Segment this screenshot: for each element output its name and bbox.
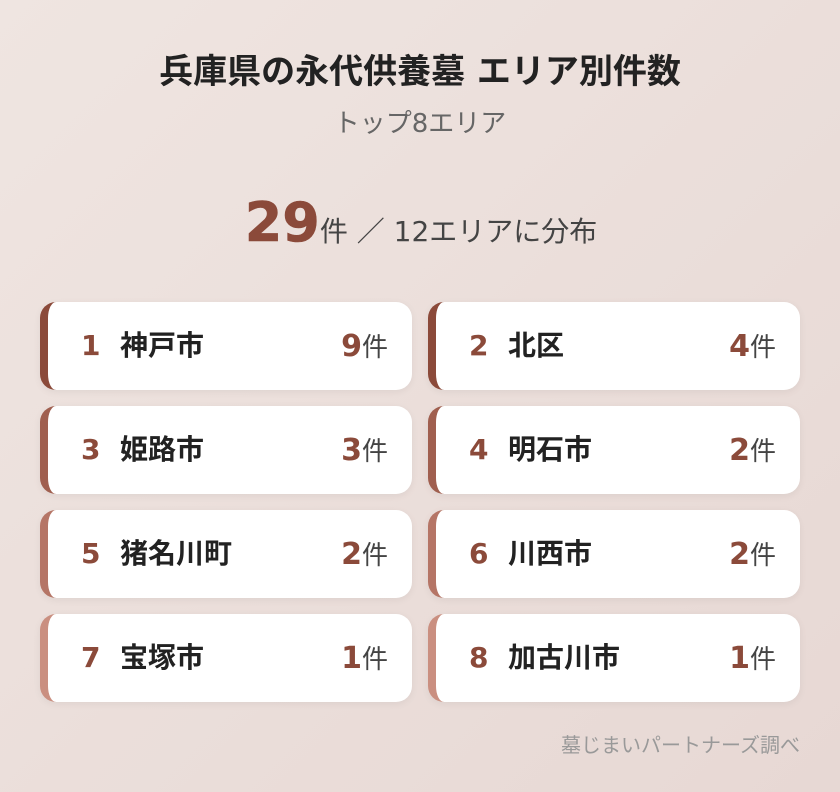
- card: rank 4 明石市: 4: [469, 433, 488, 466]
- card: rank 4 明石市: [428, 406, 800, 494]
- card: rank 6 川西市: 川西市: [508, 537, 592, 570]
- card: rank 7 宝塚市: 1件: [341, 641, 388, 676]
- total summary: 29件 ／ 12エリアに分布: [245, 191, 597, 254]
- card: rank 5 猪名川町: 猪名川町: [120, 537, 232, 570]
- subtitle: トップ8エリア: [334, 109, 506, 139]
- card: rank 6 川西市: 6: [469, 537, 488, 570]
- card: rank 8 加古川市: 加古川市: [508, 641, 620, 674]
- card: rank 3 姫路市: 3件: [341, 433, 388, 468]
- card: rank 8 加古川市: 8: [469, 641, 488, 674]
- title: 兵庫県の永代供養墓 エリア別件数: [159, 52, 681, 92]
- card: rank 1 神戸市: 9件: [341, 329, 388, 364]
- card: rank 2 北区: 北区: [508, 329, 564, 362]
- card: rank 7 宝塚市: [40, 614, 412, 702]
- card: rank 1 神戸市: [40, 302, 412, 390]
- card: rank 1 神戸市: 神戸市: [120, 329, 204, 362]
- card: rank 2 北区: 2: [469, 329, 488, 362]
- card: rank 3 姫路市: 3: [81, 433, 100, 466]
- card: rank 4 明石市: 2件: [729, 433, 776, 468]
- card: rank 2 北区: 4件: [729, 329, 776, 364]
- source note: 墓じまいパートナーズ調べ: [561, 733, 800, 757]
- card: rank 2 北区: [428, 302, 800, 390]
- card: rank 8 加古川市: [428, 614, 800, 702]
- card: rank 7 宝塚市: 7: [81, 641, 100, 674]
- card: rank 3 姫路市: 姫路市: [120, 433, 204, 466]
- card: rank 3 姫路市: [40, 406, 412, 494]
- card: rank 5 猪名川町: 5: [81, 537, 100, 570]
- card: rank 1 神戸市: 1: [81, 329, 100, 362]
- card: rank 7 宝塚市: 宝塚市: [120, 641, 204, 674]
- card: rank 5 猪名川町: [40, 510, 412, 598]
- card: rank 8 加古川市: 1件: [729, 641, 776, 676]
- card: rank 4 明石市: 明石市: [508, 433, 592, 466]
- card: rank 6 川西市: 2件: [729, 537, 776, 572]
- card: rank 6 川西市: [428, 510, 800, 598]
- card: rank 5 猪名川町: 2件: [341, 537, 388, 572]
